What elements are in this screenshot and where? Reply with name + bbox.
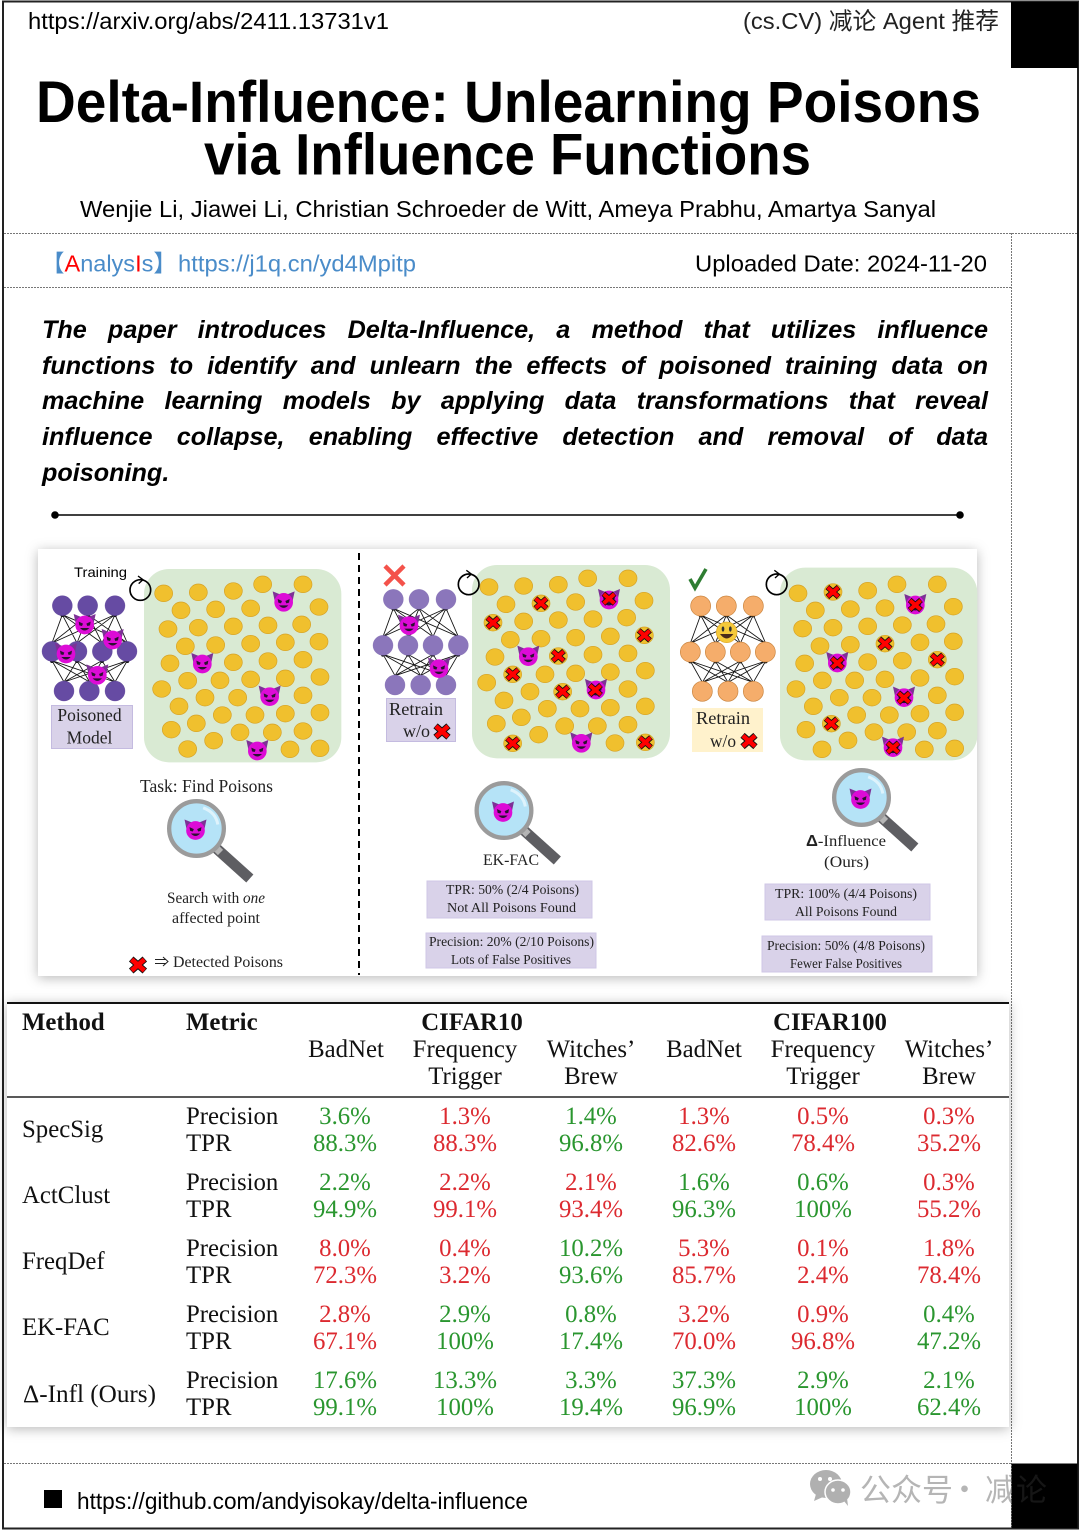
data cloud with detections bbox=[780, 568, 977, 760]
legend: detected poisons: Detected Poisons bbox=[173, 954, 283, 971]
row: FreqDef: 85.7% bbox=[672, 1262, 736, 1289]
row: ActClust: 2.2% bbox=[319, 1169, 371, 1196]
row: ActClust: 93.4% bbox=[559, 1196, 623, 1223]
table header: Frequency bbox=[413, 1036, 518, 1063]
row: ActClust: 2.2% bbox=[439, 1169, 491, 1196]
intro paragraph: poisoning. bbox=[42, 459, 169, 487]
row: EK-FAC: 3.2% bbox=[678, 1301, 730, 1328]
row: Delta-Infl: 2.9% bbox=[797, 1367, 849, 1394]
watermark tail on black block: 论 bbox=[1016, 1465, 1047, 1510]
row: SpecSig: 1.3% bbox=[678, 1103, 730, 1130]
row: FreqDef: 0.1% bbox=[797, 1235, 849, 1262]
search caption: Search with one bbox=[167, 890, 265, 907]
row: Delta-Infl: 96.9% bbox=[672, 1394, 736, 1421]
retrain label: Retrain bbox=[389, 699, 443, 719]
watermark text: 公众号·减 bbox=[860, 1465, 1016, 1510]
green check: success bbox=[690, 569, 706, 588]
retrain label: Retrain bbox=[696, 708, 750, 728]
panel: EK-FAC retrain bbox=[373, 565, 670, 968]
row: SpecSig: Precision bbox=[186, 1103, 279, 1130]
precision box: Delta-Influence bbox=[762, 936, 932, 972]
EK-FAC label: EK-FAC bbox=[483, 852, 539, 869]
TPR box: EK-FAC: TPR: 50% (2/4 Poisons) bbox=[446, 882, 579, 897]
row: Delta-Infl: 13.3% bbox=[433, 1367, 497, 1394]
row: FreqDef: 1.8% bbox=[923, 1235, 975, 1262]
row: Delta-Infl: 100% bbox=[794, 1394, 852, 1421]
partially poisoned network bbox=[373, 589, 468, 695]
table header: CIFAR10 bbox=[421, 1009, 523, 1036]
row: FreqDef: Precision bbox=[186, 1235, 279, 1262]
row: EK-FAC: EK-FAC bbox=[22, 1314, 110, 1341]
title bbox=[36, 70, 981, 188]
row: EK-FAC: 0.9% bbox=[797, 1301, 849, 1328]
row: Delta-Infl: TPR bbox=[186, 1394, 232, 1421]
panel: poisoned model training bbox=[42, 564, 341, 971]
row: SpecSig: 82.6% bbox=[672, 1130, 736, 1157]
data cloud with detections bbox=[472, 565, 670, 758]
Delta-Influence label bbox=[806, 833, 886, 871]
data cloud with poisons bbox=[144, 569, 341, 762]
row: Delta-Infl: Precision bbox=[186, 1367, 279, 1394]
row: ActClust: 55.2% bbox=[917, 1196, 981, 1223]
Delta-Influence label: (Ours) bbox=[824, 854, 869, 871]
row: Delta-Infl: 99.1% bbox=[313, 1394, 377, 1421]
row: EK-FAC: 17.4% bbox=[559, 1328, 623, 1355]
footer bullet bbox=[44, 1490, 62, 1508]
table header bbox=[22, 1009, 993, 1090]
training cycle icon bbox=[130, 576, 151, 600]
table header: Frequency bbox=[771, 1036, 876, 1063]
row: Delta-Infl: 2.1% bbox=[923, 1367, 975, 1394]
row: SpecSig: 1.3% bbox=[439, 1103, 491, 1130]
TPR box: Delta-Influence: TPR: 100% (4/4 Poisons) bbox=[775, 886, 917, 901]
TPR box: Delta-Influence bbox=[765, 884, 930, 920]
row: ActClust: 96.3% bbox=[672, 1196, 736, 1223]
precision box: EK-FAC: Lots of False Positives bbox=[451, 952, 571, 967]
search caption bbox=[167, 890, 265, 927]
row: Delta-Infl: 19.4% bbox=[559, 1394, 623, 1421]
icon: WeChat watermark bbox=[810, 1470, 851, 1506]
row: FreqDef: 2.4% bbox=[797, 1262, 849, 1289]
row: ActClust: 99.1% bbox=[433, 1196, 497, 1223]
panel: Delta-Influence retrain bbox=[680, 568, 977, 972]
intro paragraph: machine learning models by applying data transformations that reveal bbox=[42, 387, 988, 415]
row: Delta-Infl: 62.4% bbox=[917, 1394, 981, 1421]
row: SpecSig: 0.3% bbox=[923, 1103, 975, 1130]
row: EK-FAC: 2.9% bbox=[439, 1301, 491, 1328]
row: SpecSig: 3.6% bbox=[319, 1103, 371, 1130]
red cross: failure bbox=[385, 566, 404, 585]
row: FreqDef: 8.0% bbox=[319, 1235, 371, 1262]
row: EK-FAC bbox=[22, 1301, 981, 1355]
poisoned model label: Poisoned bbox=[57, 705, 122, 725]
table header: Brew bbox=[564, 1063, 618, 1090]
row: SpecSig: 35.2% bbox=[917, 1130, 981, 1157]
TPR box: EK-FAC: Not All Poisons Found bbox=[447, 900, 576, 915]
retrain label bbox=[386, 698, 456, 742]
intro paragraph: influence collapse, enabling effective detection and removal of data bbox=[42, 423, 988, 451]
authors: Wenjie Li, Jiawei Li, Christian Schroeder de Witt, Ameya Prabhu, Amartya Sanyal bbox=[80, 196, 936, 222]
row: EK-FAC: TPR bbox=[186, 1328, 232, 1355]
row: Delta-Infl: Δ-Infl (Ours) bbox=[23, 1381, 156, 1408]
row: SpecSig: 1.4% bbox=[565, 1103, 617, 1130]
row: ActClust: 0.6% bbox=[797, 1169, 849, 1196]
title: via Influence Functions bbox=[204, 122, 811, 188]
retrain cycle icon bbox=[458, 570, 479, 595]
row: FreqDef: 72.3% bbox=[313, 1262, 377, 1289]
precision box: EK-FAC bbox=[426, 933, 596, 968]
row: FreqDef: FreqDef bbox=[22, 1248, 105, 1275]
intro paragraph bbox=[42, 316, 988, 487]
Delta-Influence label: Δ-Influence bbox=[806, 833, 886, 850]
poisoned model label bbox=[52, 705, 132, 748]
row: Delta-Infl bbox=[23, 1367, 981, 1421]
intro paragraph: functions to identify and unlearn the effects of poisoned training data on bbox=[42, 352, 988, 380]
training label: Training bbox=[74, 564, 127, 580]
poisoned network bbox=[42, 596, 137, 701]
row: EK-FAC: Precision bbox=[186, 1301, 279, 1328]
title: Delta-Influence: Unlearning Poisons bbox=[36, 70, 981, 135]
row: FreqDef: TPR bbox=[186, 1262, 232, 1289]
table header: Brew bbox=[922, 1063, 976, 1090]
row: SpecSig: 88.3% bbox=[433, 1130, 497, 1157]
category and recommender: (cs.CV) 减论 Agent 推荐 bbox=[743, 8, 999, 34]
table header: Trigger bbox=[786, 1063, 860, 1090]
table header: Witches’ bbox=[547, 1036, 635, 1063]
row: EK-FAC: 2.8% bbox=[319, 1301, 371, 1328]
TPR box: EK-FAC bbox=[427, 881, 592, 918]
row: SpecSig: 0.5% bbox=[797, 1103, 849, 1130]
table header: Method bbox=[22, 1009, 105, 1036]
row: SpecSig: 96.8% bbox=[559, 1130, 623, 1157]
poisoned model label: Model bbox=[67, 728, 112, 748]
row: ActClust: 100% bbox=[794, 1196, 852, 1223]
row: Delta-Infl: 3.3% bbox=[565, 1367, 617, 1394]
row: Delta-Infl: 37.3% bbox=[672, 1367, 736, 1394]
row: FreqDef: 10.2% bbox=[559, 1235, 623, 1262]
black corner block: bottom right bbox=[1012, 1464, 1078, 1528]
search caption: affected point bbox=[172, 910, 261, 927]
magnifier: task bbox=[169, 801, 250, 878]
retrain label: w/o bbox=[710, 731, 736, 751]
row: ActClust: 0.3% bbox=[923, 1169, 975, 1196]
precision box: Delta-Influence: Precision: 50% (4/8 Poisons) bbox=[767, 938, 925, 953]
arXiv link: https://arxiv.org/abs/2411.13731v1 bbox=[28, 8, 389, 34]
shortened link: https://j1q.cn/yd4Mpitp bbox=[178, 250, 416, 276]
row: ActClust bbox=[22, 1169, 981, 1223]
row: ActClust: 1.6% bbox=[678, 1169, 730, 1196]
row: EK-FAC: 70.0% bbox=[672, 1328, 736, 1355]
row: FreqDef: 78.4% bbox=[917, 1262, 981, 1289]
row: SpecSig: SpecSig bbox=[22, 1116, 103, 1143]
row: SpecSig: 88.3% bbox=[313, 1130, 377, 1157]
row: EK-FAC: 67.1% bbox=[313, 1328, 377, 1355]
row: FreqDef: 93.6% bbox=[559, 1262, 623, 1289]
table header: CIFAR100 bbox=[773, 1009, 887, 1036]
row: Delta-Infl: 100% bbox=[436, 1394, 494, 1421]
divider with end dots bbox=[51, 511, 964, 519]
row: Delta-Infl: 17.6% bbox=[313, 1367, 377, 1394]
figure panel bbox=[38, 549, 977, 976]
row: ActClust: TPR bbox=[186, 1196, 232, 1223]
table header: BadNet bbox=[666, 1036, 742, 1063]
analysis link: 【AnalysIs】 bbox=[41, 244, 177, 278]
row: ActClust: ActClust bbox=[22, 1182, 110, 1209]
table header: BadNet bbox=[308, 1036, 384, 1063]
precision box: EK-FAC: Precision: 20% (2/10 Poisons) bbox=[429, 934, 594, 949]
magnifier: EK-FAC bbox=[477, 783, 557, 860]
row: FreqDef bbox=[22, 1235, 981, 1289]
table header: Witches’ bbox=[905, 1036, 993, 1063]
black corner block: top right bbox=[1011, 2, 1078, 68]
retrain cycle icon bbox=[766, 570, 787, 595]
magnifier: Delta-Influence bbox=[834, 770, 915, 847]
retrain label bbox=[692, 708, 763, 752]
row: FreqDef: 0.4% bbox=[439, 1235, 491, 1262]
row: SpecSig: 78.4% bbox=[791, 1130, 855, 1157]
results table bbox=[7, 1002, 1009, 1427]
row: ActClust: Precision bbox=[186, 1169, 279, 1196]
row: SpecSig bbox=[22, 1103, 981, 1157]
row: EK-FAC: 47.2% bbox=[917, 1328, 981, 1355]
retrain label: w/o bbox=[403, 721, 430, 741]
row: SpecSig: TPR bbox=[186, 1130, 232, 1157]
row: EK-FAC: 0.4% bbox=[923, 1301, 975, 1328]
task label: Task: Find Poisons bbox=[140, 776, 273, 796]
row: FreqDef: 3.2% bbox=[439, 1262, 491, 1289]
row: ActClust: 2.1% bbox=[565, 1169, 617, 1196]
row: EK-FAC: 0.8% bbox=[565, 1301, 617, 1328]
precision box: Delta-Influence: Fewer False Positives bbox=[790, 956, 902, 971]
clean network bbox=[680, 596, 775, 701]
row: ActClust: 94.9% bbox=[313, 1196, 377, 1223]
TPR box: Delta-Influence: All Poisons Found bbox=[795, 904, 897, 919]
row: FreqDef: 5.3% bbox=[678, 1235, 730, 1262]
upload date: Uploaded Date: 2024-11-20 bbox=[695, 250, 987, 276]
row: EK-FAC: 96.8% bbox=[791, 1328, 855, 1355]
intro paragraph: The paper introduces Delta-Influence, a method that utilizes influence bbox=[42, 316, 988, 344]
row: EK-FAC: 100% bbox=[436, 1328, 494, 1355]
table header: Metric bbox=[186, 1009, 258, 1036]
table header: Trigger bbox=[428, 1063, 502, 1090]
GitHub link: https://github.com/andyisokay/delta-influence bbox=[77, 1488, 528, 1514]
